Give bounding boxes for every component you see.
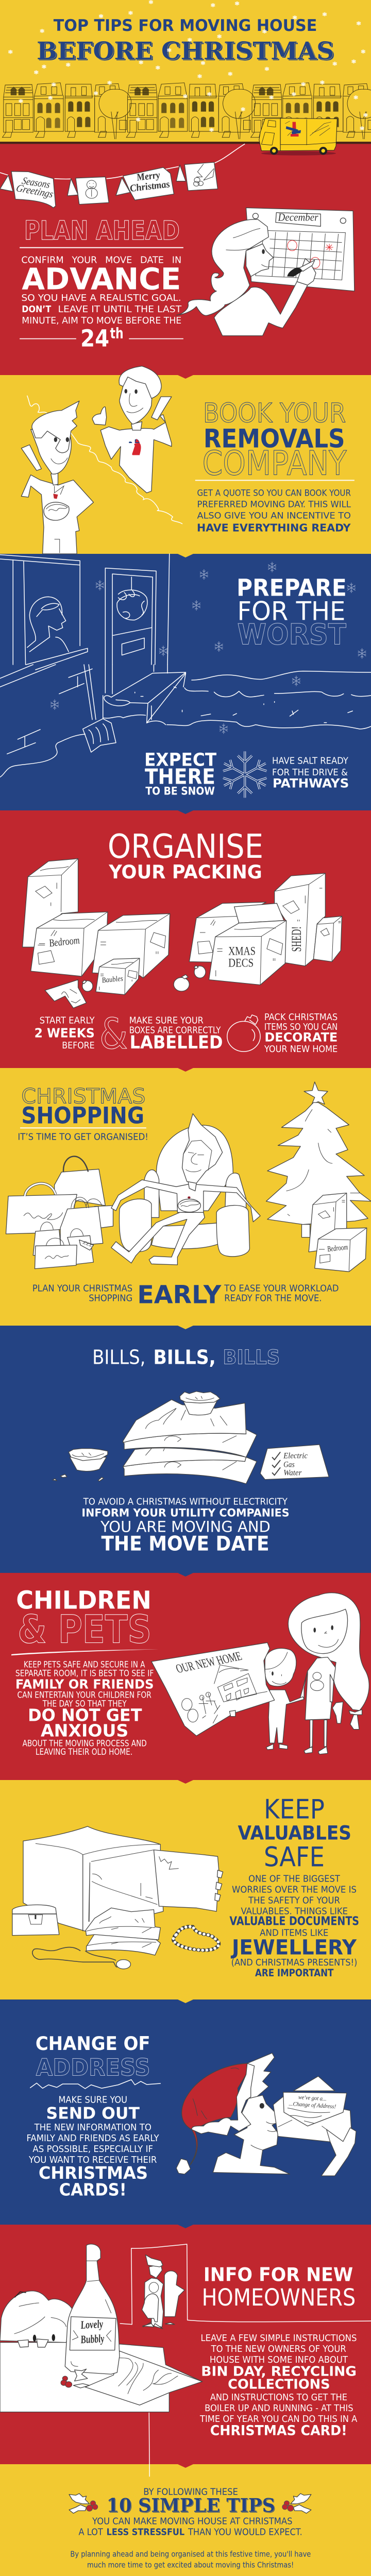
- tip: pack christmas items: DECORATE: [264, 1030, 338, 1044]
- right group of boxes: XMAS: [228, 944, 256, 958]
- heading and body text: AND ITEMS LIKE: [260, 1928, 328, 1938]
- tip: start early: BEFORE: [62, 1040, 95, 1050]
- summary text: 10 SIMPLE TIPS: [107, 2496, 276, 2517]
- house front with window and door: [0, 554, 170, 670]
- tip: start early: [35, 1015, 95, 1050]
- heading: CHRISTMAS: [21, 1084, 145, 1109]
- body text: CARDS!: [59, 2180, 127, 2200]
- section nine: change of address: [26, 2033, 356, 2200]
- icon: large snowflake: [223, 751, 266, 798]
- body text: COLLECTIONS: [228, 2377, 330, 2392]
- heading: YOUR PACKING: [108, 861, 262, 883]
- body text: [197, 488, 351, 534]
- bubbly bottle: Bubbly: [80, 2332, 105, 2346]
- heading: [92, 1346, 280, 1369]
- body text: LEAVE IT UNTIL THE LAST: [58, 304, 181, 314]
- salt text: [272, 756, 349, 790]
- bubbly bottle: Lovely: [80, 2317, 104, 2331]
- body text: SEND OUT: [46, 2104, 140, 2123]
- expect snow text: TO BE SNOW: [145, 785, 215, 798]
- christmas tree: [266, 1082, 371, 1225]
- rule: [195, 480, 355, 481]
- section four: organise your packing: [23, 827, 342, 1059]
- rule: [20, 247, 183, 248]
- section six: bills: [53, 1346, 329, 1555]
- section three: prepare for the worst: [0, 554, 371, 798]
- header panel: [0, 0, 371, 156]
- card: seasons greetings: Greetings: [14, 183, 55, 200]
- utilities checklist: Gas: [283, 1460, 295, 1469]
- child figure: [265, 1648, 304, 1750]
- heading: PLAN AHEAD: [24, 215, 180, 246]
- jewellery box: [12, 1905, 59, 1936]
- heading and body text: SAFE: [264, 1841, 325, 1873]
- body text: TO AVOID A CHRISTMAS WITHOUT ELECTRICITY: [83, 1497, 288, 1507]
- shopping bags: [6, 1156, 113, 1269]
- date 24th: 24: [80, 325, 109, 352]
- expect snow text: EXPECT: [144, 750, 216, 770]
- card: holly: [176, 162, 217, 191]
- body text: [199, 2333, 358, 2438]
- expect snow text: [144, 750, 216, 798]
- holly on table: [61, 2369, 90, 2388]
- person peeking over table: [0, 2291, 72, 2343]
- body text: DO NOT GET: [28, 1706, 142, 1725]
- body text: YOU ARE MOVING AND: [100, 1518, 271, 1536]
- mother figure: [288, 1593, 369, 1754]
- heading: BILLS: [223, 1346, 280, 1369]
- shopping bags: £££: [81, 1240, 94, 1248]
- utilities checklist: [260, 1445, 329, 1480]
- summary text: A LOT: [78, 2527, 103, 2537]
- our new home poster: OUR NEW HOME: [174, 1649, 244, 1676]
- plan early text: [32, 1280, 339, 1309]
- heading: [11, 1585, 159, 1655]
- heading: ORGANISE: [108, 827, 263, 866]
- body text: [15, 1659, 154, 1757]
- stack of bills: [123, 1400, 257, 1484]
- heading: [237, 574, 347, 651]
- card: merry christmas: Merry: [135, 170, 161, 183]
- heading: BILLS,: [154, 1346, 216, 1369]
- body text: LEAVING THEIR OLD HOME.: [36, 1747, 132, 1757]
- curly line: [27, 396, 182, 524]
- utilities checklist: Electric: [283, 1451, 308, 1460]
- heading: & PETS: [18, 1607, 151, 1652]
- tip: labelled boxes: LABELLED: [130, 1032, 223, 1053]
- body text: FAMILY OR FRIENDS: [15, 1677, 154, 1692]
- body text: DON’T: [22, 304, 52, 314]
- plan early text: PLAN YOUR CHRISTMAS: [32, 1283, 132, 1294]
- body text: FAMILY AND FRIENDS AS EARLY: [26, 2133, 159, 2143]
- ground line: [0, 142, 371, 144]
- packed boxes by tree: Bedroom: [326, 1243, 349, 1253]
- body text: KEEP PETS SAFE AND SECURE IN A: [24, 1659, 145, 1670]
- card: merry christmas: [116, 167, 174, 200]
- heading: ADDRESS: [36, 2054, 150, 2081]
- expect snow text: THERE: [145, 764, 215, 789]
- utilities checklist: Water: [283, 1468, 302, 1477]
- woman figure: [176, 219, 316, 336]
- woman in window: [27, 597, 69, 652]
- heading: [202, 2264, 356, 2311]
- packed boxes by tree: [301, 1193, 367, 1272]
- picture frame outline: [120, 2244, 371, 2477]
- footer panel: [69, 2486, 311, 2576]
- street of houses: [3, 83, 371, 139]
- man in santa hat reading card: we've got a...: [298, 2094, 327, 2102]
- summary text: THAN YOU WOULD EXPECT.: [188, 2527, 302, 2537]
- tip: labelled boxes: BOXES ARE CORRECTLY: [129, 1025, 221, 1036]
- man with phone: [21, 401, 93, 554]
- closing text: [70, 2550, 311, 2569]
- section ten: info for new homeowners: [0, 2244, 371, 2477]
- letter: [85, 2351, 203, 2405]
- plan early text: READY FOR THE MOVE.: [224, 1293, 322, 1303]
- pendant on cord: [32, 1947, 130, 1969]
- heading: CHILDREN: [16, 1585, 151, 1615]
- plan early text: SHOPPING: [89, 1293, 132, 1303]
- tip: labelled boxes: [129, 1015, 223, 1053]
- plan ahead text: [20, 215, 183, 352]
- body text: AS POSSIBLE, ESPECIALLY IF: [32, 2144, 153, 2154]
- small snowflakes: [50, 562, 366, 734]
- table: [0, 2343, 203, 2412]
- heading: [30, 2033, 160, 2089]
- falling snowflakes: [8, 0, 368, 132]
- section eight: keep valuables safe: [12, 1793, 359, 1979]
- fingers: [18, 2339, 48, 2347]
- woman marking calendar: [176, 208, 355, 336]
- removal van: [259, 118, 337, 156]
- body text: ADVANCE: [22, 262, 181, 297]
- summary text: BY FOLLOWING THESE: [143, 2486, 238, 2497]
- body text: [21, 255, 181, 326]
- summary text: 10 SIMPLE TIPS: [107, 2495, 275, 2517]
- heading and body text: KEEP: [264, 1793, 325, 1825]
- wreath: [117, 590, 147, 620]
- tip: pack christmas items: YOUR NEW HOME: [264, 1044, 338, 1054]
- ampersand: &: [99, 1010, 128, 1059]
- section five: christmas shopping: [6, 1082, 371, 1309]
- man giving thumbs up: [92, 366, 172, 493]
- plan early text: EARLY: [137, 1280, 222, 1309]
- tip: start early: START EARLY: [40, 1015, 95, 1026]
- date 24th: th: [110, 325, 124, 342]
- holly left: [69, 2494, 98, 2513]
- heading: [108, 827, 263, 883]
- body text: THE NEW INFORMATION TO: [34, 2122, 151, 2132]
- section one: plan ahead: [0, 144, 355, 352]
- mince pie top: [180, 1392, 220, 1415]
- summary text: LESS STRESSFUL: [107, 2527, 184, 2537]
- tip: start early: 2 WEEKS: [35, 1026, 95, 1041]
- body text: [26, 2095, 159, 2200]
- body text: ANXIOUS: [41, 1721, 128, 1741]
- shovel, steps and snow: [0, 665, 371, 777]
- mince pie with crumbs: [53, 1449, 108, 1481]
- left group of boxes: Bedroom: [48, 935, 80, 949]
- body text: MAKE SURE YOU: [58, 2095, 127, 2105]
- body text: MINUTE, AIM TO MOVE BEFORE THE: [22, 315, 181, 326]
- icon: bauble: [227, 1015, 260, 1052]
- body text: THE DAY SO THAT THEY: [42, 1699, 127, 1708]
- card: snowman: [68, 177, 109, 205]
- body text: ABOUT THE MOVING PROCESS AND: [23, 1738, 147, 1748]
- tip: pack christmas items: [264, 1012, 338, 1054]
- body text: YOU WANT TO RECEIVE THEIR: [28, 2155, 157, 2165]
- calendar: [246, 208, 355, 291]
- safe: [23, 1826, 223, 1931]
- body text: [81, 1497, 290, 1555]
- pearls: [173, 1927, 219, 1950]
- heading: CHANGE OF: [36, 2033, 150, 2055]
- left group of boxes: Baubles: [101, 974, 124, 985]
- tip: pack christmas items: PACK CHRISTMAS: [264, 1012, 338, 1022]
- card: seasons greetings: [0, 172, 56, 208]
- holly right: [282, 2494, 311, 2513]
- man in santa hat reading card: ...Change of Address!: [289, 2100, 336, 2110]
- right group of boxes: SHED!: [289, 926, 305, 952]
- body text: CHRISTMAS: [39, 2163, 148, 2183]
- body text: SEPARATE ROOM, IT IS BEST TO SEE IF: [15, 1668, 154, 1678]
- calendar: December: [278, 212, 318, 223]
- family portrait: [142, 2255, 184, 2329]
- body text: SO YOU HAVE A REALISTIC GOAL.: [21, 293, 181, 303]
- heading: BILLS,: [92, 1346, 145, 1369]
- right group of boxes: DECS: [228, 957, 254, 970]
- card: seasons greetings: Seasons: [21, 175, 52, 191]
- left group of boxes: [23, 859, 170, 1008]
- heading: IT’S TIME TO GET ORGANISED!: [18, 1132, 148, 1142]
- section two: book your removals company: [21, 366, 355, 554]
- man in santa hat reading card: [176, 2053, 356, 2176]
- body text: THE MOVE DATE: [102, 1532, 269, 1555]
- section notches: [178, 375, 193, 2468]
- man relaxing in armchair: [111, 1114, 260, 1265]
- summary text: [78, 2486, 302, 2537]
- heading: [18, 1084, 148, 1142]
- body text: CAN ENTERTAIN YOUR CHILDREN FOR: [18, 1690, 151, 1700]
- heading: SHOPPING: [21, 1102, 144, 1129]
- card bunting string: [0, 144, 245, 179]
- body text: INFORM YOUR UTILITY COMPANIES: [81, 1506, 290, 1519]
- section seven: children and pets: [11, 1585, 369, 1757]
- heading and body text: [229, 1793, 359, 1979]
- tip: labelled boxes: MAKE SURE YOUR: [129, 1015, 204, 1026]
- bubbly bottle: [65, 2244, 120, 2374]
- papers: [86, 1908, 160, 1955]
- our new home poster: [151, 1642, 275, 1736]
- card: merry christmas: Christmas: [129, 179, 171, 194]
- body text: CONFIRM YOUR MOVE DATE IN: [21, 255, 181, 265]
- necklace: [173, 1927, 219, 1950]
- right group of boxes: [174, 873, 342, 991]
- date 24th: [20, 325, 183, 352]
